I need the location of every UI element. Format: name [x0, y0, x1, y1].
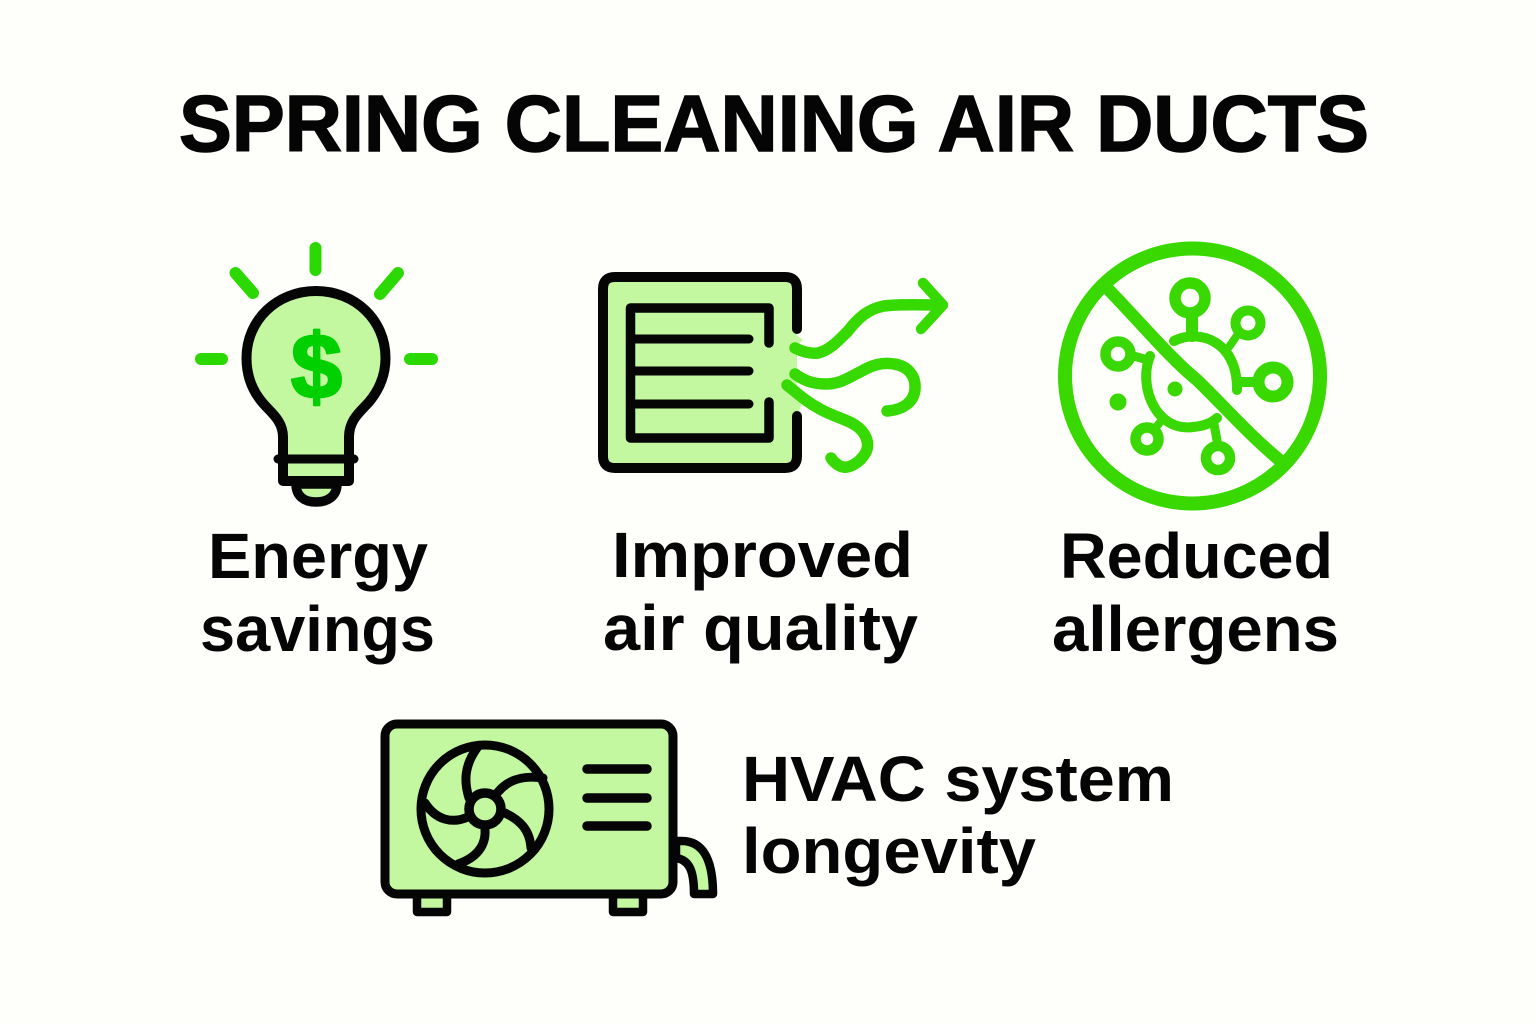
panel: hvac system longevity	[385, 724, 1174, 912]
label: hvac system longevity: longevity	[742, 815, 1036, 887]
icon: air vent with airflow arrows	[603, 277, 943, 468]
label: reduced allergens: allergens	[1052, 593, 1339, 665]
panel: improved air quality	[603, 277, 943, 664]
icon: light bulb with dollar sign: $	[291, 316, 342, 418]
label: reduced allergens	[1052, 520, 1339, 665]
title: SPRING CLEANING AIR DUCTS	[179, 79, 1369, 168]
label: improved air quality: Improved	[612, 519, 913, 591]
panel: energy savings	[200, 248, 435, 665]
icon: outdoor hvac unit	[385, 724, 713, 912]
label: improved air quality	[603, 519, 918, 664]
label: improved air quality: air quality	[603, 592, 918, 664]
label: energy savings: savings	[200, 593, 435, 665]
label: energy savings: Energy	[208, 520, 428, 592]
label: hvac system longevity	[742, 743, 1174, 887]
panel: reduced allergens	[1052, 248, 1339, 665]
icon: light bulb with dollar sign	[201, 248, 432, 502]
label: reduced allergens: Reduced	[1060, 520, 1333, 592]
label: energy savings	[200, 520, 435, 665]
label: hvac system longevity: HVAC system	[742, 743, 1174, 815]
icon: crossed-out virus	[1065, 248, 1320, 504]
